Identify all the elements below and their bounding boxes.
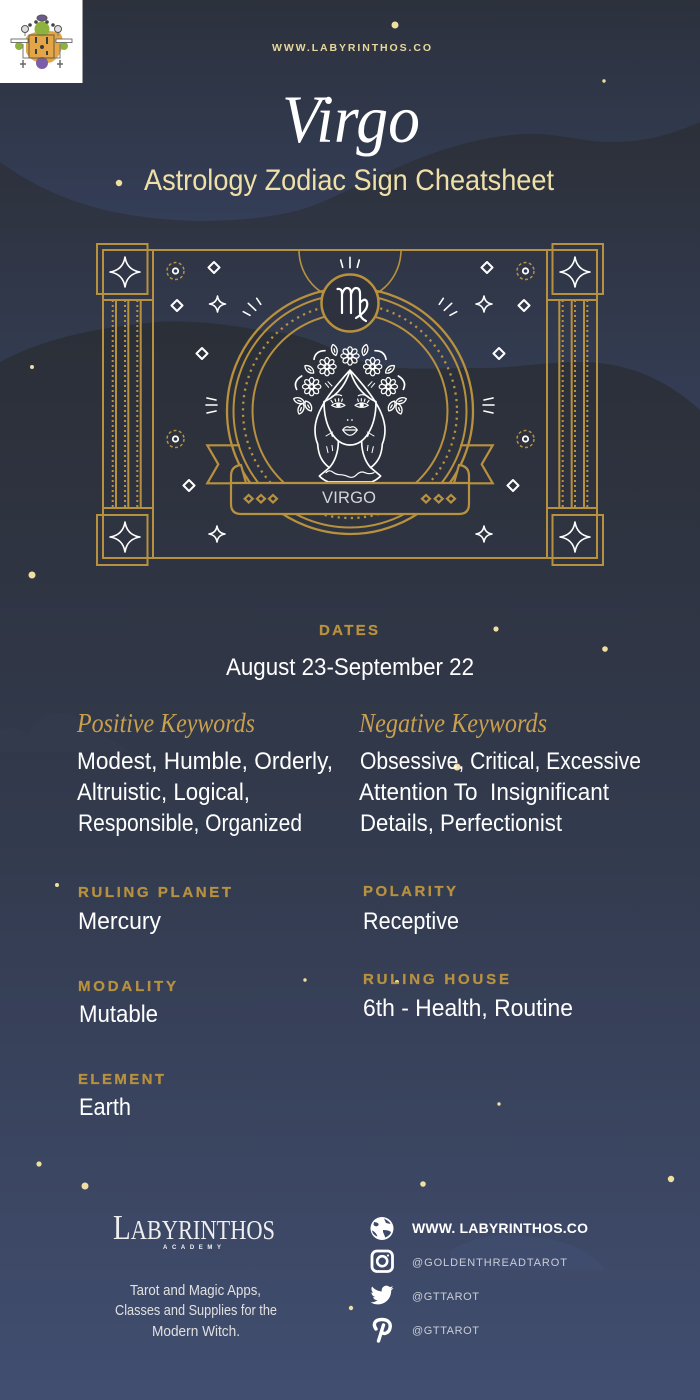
negative keywords: Details, Perfectionist bbox=[360, 810, 562, 837]
social links: @GTTAROT bbox=[412, 1291, 479, 1303]
positive keywords bbox=[76, 708, 333, 837]
icon: instagram bbox=[372, 1251, 392, 1272]
subtitle: Astrology Zodiac Sign Cheatsheet bbox=[144, 164, 555, 197]
ruling house bbox=[363, 971, 573, 1022]
social links: @GOLDENTHREADTAROT bbox=[412, 1257, 567, 1269]
footer brand: Modern Witch. bbox=[152, 1324, 240, 1340]
ruling planet: Mercury bbox=[78, 908, 161, 935]
positive keywords: Positive Keywords bbox=[76, 708, 255, 738]
ruling house: RULING HOUSE bbox=[363, 971, 509, 988]
dates: August 23-September 22 bbox=[226, 654, 474, 681]
footer brand: LABYRINTHOS bbox=[113, 1208, 275, 1247]
footer brand: ACADEMY bbox=[163, 1245, 221, 1251]
modality: Mutable bbox=[79, 1001, 158, 1028]
element bbox=[78, 1071, 164, 1121]
ruling house: 6th - Health, Routine bbox=[363, 995, 573, 1022]
icon: twitter bbox=[370, 1286, 394, 1304]
polarity: Receptive bbox=[363, 908, 459, 935]
dates: DATES bbox=[319, 622, 378, 639]
virgo glyph medallion bbox=[322, 274, 378, 332]
name banner: VIRGO bbox=[322, 489, 376, 507]
icon: pinterest bbox=[374, 1320, 390, 1341]
logo badge bbox=[0, 0, 83, 83]
positive keywords: Responsible, Organized bbox=[78, 810, 302, 837]
icon: globe bbox=[370, 1217, 394, 1240]
negative keywords: Obsessive, Critical, Excessive bbox=[360, 748, 641, 775]
website header: WWW.LABYRINTHOS.CO bbox=[272, 42, 431, 54]
negative keywords: Attention To Insignificant bbox=[359, 779, 609, 806]
modality: MODALITY bbox=[78, 978, 176, 995]
arch bbox=[299, 250, 401, 293]
woman with flowers bbox=[293, 344, 407, 482]
ribbon tails bbox=[207, 445, 493, 483]
ruling planet: RULING PLANET bbox=[78, 884, 231, 901]
rings bbox=[227, 288, 473, 534]
modality bbox=[78, 978, 176, 1028]
small sky ornaments bbox=[167, 257, 534, 542]
social links bbox=[412, 1220, 588, 1337]
element: ELEMENT bbox=[78, 1071, 164, 1088]
frame lines bbox=[153, 250, 547, 558]
positive keywords: Altruistic, Logical, bbox=[77, 779, 250, 806]
positive keywords: Modest, Humble, Orderly, bbox=[77, 748, 333, 775]
ruling planet bbox=[78, 884, 231, 935]
polarity bbox=[363, 883, 459, 935]
footer brand bbox=[113, 1208, 277, 1340]
social links: @GTTAROT bbox=[412, 1325, 479, 1337]
negative keywords bbox=[358, 708, 641, 837]
negative keywords: Negative Keywords bbox=[358, 708, 547, 738]
zodiac illustration bbox=[97, 244, 603, 565]
name banner bbox=[231, 465, 469, 514]
right column bbox=[547, 244, 603, 565]
footer brand: Tarot and Magic Apps, bbox=[130, 1283, 261, 1299]
footer brand: Classes and Supplies for the bbox=[115, 1303, 277, 1319]
polarity: POLARITY bbox=[363, 883, 456, 900]
dates bbox=[226, 622, 474, 681]
left column bbox=[97, 244, 153, 565]
element: Earth bbox=[79, 1094, 131, 1121]
title: Virgo bbox=[282, 81, 420, 157]
social links: WWW. LABYRINTHOS.CO bbox=[412, 1220, 588, 1236]
